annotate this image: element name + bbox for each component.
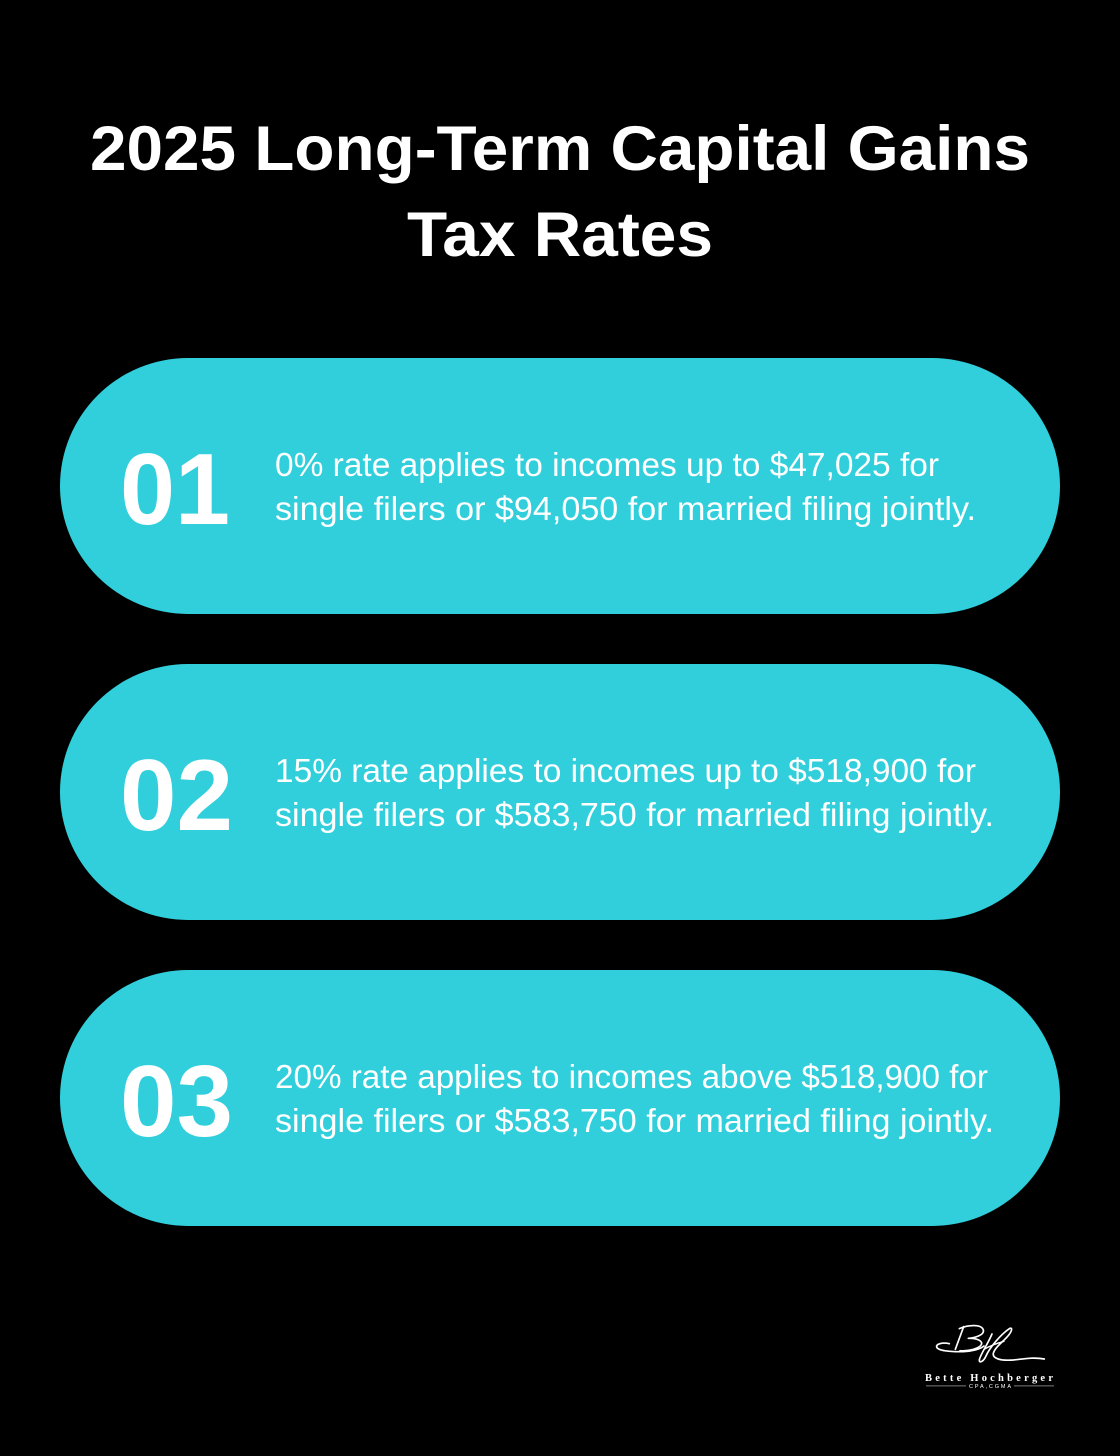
text: 15% rate description: single filers or $583,750 for married filing jointly. [275,796,994,833]
text: 0% rate description [275,446,976,527]
title: 2025 Long-Term Capital Gains [90,114,1030,184]
panel: 0% rate [60,358,1060,614]
title [90,114,1030,270]
text: 20% rate description: single filers or $583,750 for married filing jointly. [275,1102,994,1139]
text: 0% rate description: single filers or $94,050 for married filing jointly. [275,490,976,527]
number 01: 01 [120,434,230,546]
text: 15% rate description [275,752,994,833]
panel: 20% rate [60,970,1060,1226]
number 02: 02 [120,740,233,852]
title: Tax Rates [407,200,713,270]
text: 0% rate description: 0% rate applies to incomes up to $47,025 for [275,446,939,483]
logo: Bette Hochberger: CPA,CGMA [969,1384,1011,1390]
logo: Bette Hochberger [925,1326,1054,1390]
icon: signature flourish [937,1326,1044,1362]
logo: Bette Hochberger: Bette Hochberger [925,1373,1053,1384]
panel: 15% rate [60,664,1060,920]
text: 20% rate description: 20% rate applies to incomes above $518,900 for [275,1058,988,1095]
text: 20% rate description [275,1058,994,1139]
number 03: 03 [120,1046,233,1158]
text: 15% rate description: 15% rate applies to incomes up to $518,900 for [275,752,976,789]
